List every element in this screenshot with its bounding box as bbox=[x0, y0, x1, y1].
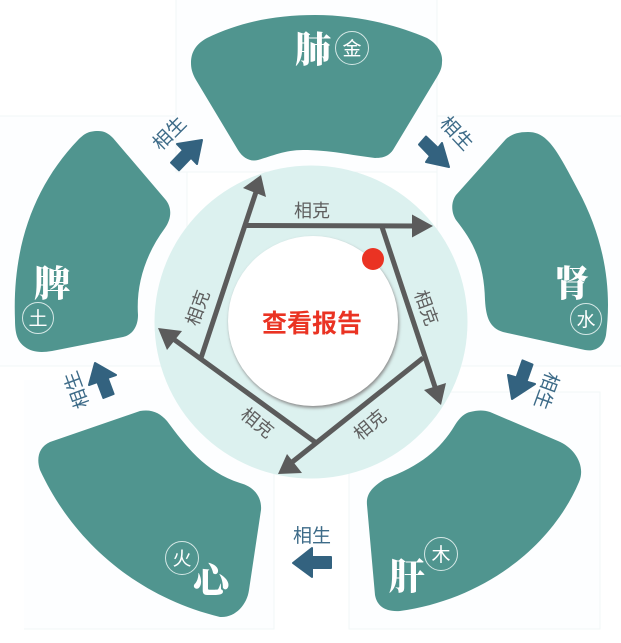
arrow: generate right-lower bbox=[508, 360, 563, 412]
panel: kidney: 肾 bbox=[554, 264, 590, 304]
panel: spleen bbox=[15, 131, 170, 352]
arrow: generate left-lower: 相生 bbox=[60, 368, 94, 411]
panel: spleen: 土 bbox=[28, 308, 48, 330]
arrow: generate left-lower bbox=[60, 363, 116, 411]
panel: lung: 金 bbox=[342, 38, 362, 60]
arrow: restraint right: 相克 bbox=[410, 288, 442, 328]
arrow: generate top-right: 相生 bbox=[435, 112, 477, 155]
panel: liver: 肝 bbox=[389, 557, 425, 597]
panel: spleen: 脾 bbox=[34, 264, 70, 304]
arrow: restraint lower right: 相克 bbox=[350, 406, 390, 444]
arrow: generate top-left bbox=[148, 112, 202, 170]
restraint ring bbox=[154, 166, 468, 478]
panel: liver: 木 bbox=[431, 544, 451, 566]
arrow: restraint right bbox=[382, 227, 446, 405]
panel: heart: 火 bbox=[172, 549, 192, 570]
arrow: generate right-lower: 相生 bbox=[529, 369, 563, 412]
arrow: generate top-right bbox=[419, 112, 477, 167]
arrow: restraint left: 相克 bbox=[182, 288, 214, 328]
arrow: restraint left bbox=[182, 175, 266, 358]
panel: lung bbox=[191, 15, 442, 161]
panel: kidney bbox=[452, 132, 608, 350]
panel: lung: 肺 bbox=[295, 30, 331, 70]
arrow: restraint lower left: 相克 bbox=[237, 404, 277, 442]
center button bbox=[228, 236, 399, 408]
panel: liver bbox=[367, 410, 581, 611]
arrow: generate bottom: 相生 bbox=[293, 525, 331, 547]
red dot bbox=[362, 248, 384, 270]
arrow: restraint top bbox=[244, 201, 433, 238]
panel: heart bbox=[38, 410, 261, 617]
arrow: restraint lower left bbox=[158, 328, 315, 442]
arrow: generate top-left: 相生 bbox=[148, 112, 191, 155]
panel: kidney: 水 bbox=[576, 309, 596, 331]
arrow: restraint lower right bbox=[278, 358, 423, 474]
arrow: generate bottom bbox=[293, 525, 331, 577]
center button: 查看报告 bbox=[262, 310, 362, 338]
arrow: restraint top: 相克 bbox=[294, 201, 330, 221]
panel: heart: 心 bbox=[193, 561, 235, 601]
